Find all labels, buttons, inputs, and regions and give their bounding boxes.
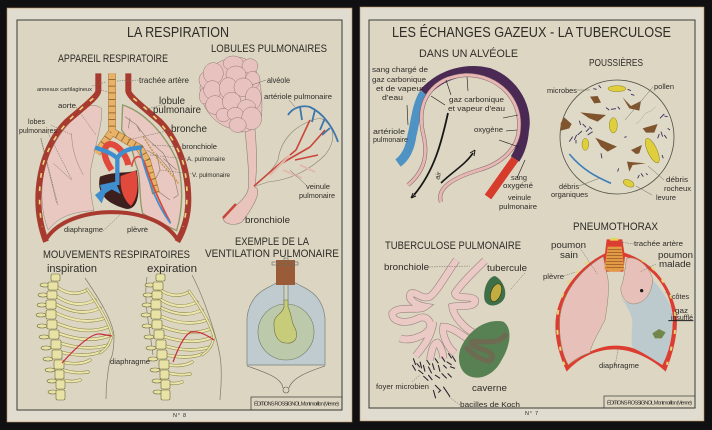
- labels: pneumothorax: insufflé: [671, 315, 693, 322]
- labels: tuberculosis: bronchiole: [384, 262, 429, 272]
- cavern: [459, 321, 509, 378]
- labels: alveolus: gaz carbonique: [449, 95, 504, 104]
- panel: échanges gazeux poster: [360, 7, 704, 421]
- labels: thorax: diaphragme: [64, 225, 103, 234]
- lobule vessels: [223, 106, 338, 218]
- lung balloon: [274, 300, 297, 343]
- labels: lobule: [245, 76, 335, 226]
- tube: [284, 258, 288, 302]
- labels: thorax: pulmonaires: [19, 128, 57, 135]
- ribs: [54, 287, 112, 382]
- labels: dust: levure: [656, 195, 676, 202]
- publisher text: ÉDITIONS ROSSIGNOL Montmorillon (Vienne): [254, 400, 339, 408]
- tubercle: [484, 276, 505, 305]
- poster inner frame right: [369, 20, 695, 408]
- inner circle: [258, 304, 314, 360]
- title: LA RESPIRATION: [127, 24, 229, 41]
- diaphragm curve: [62, 334, 112, 363]
- panel: la respiration poster: [7, 8, 352, 422]
- rib marks: [557, 260, 675, 365]
- labels: pneumothorax: trachée artère: [634, 239, 683, 248]
- poster paper right: [360, 7, 704, 421]
- labels: thorax: [19, 76, 231, 234]
- labels: thorax: lobes: [28, 119, 46, 126]
- label: inspiration: inspiration: [47, 263, 97, 275]
- heading: mouvements respiratoires: MOUVEMENTS RESPIRATOIRES: [43, 249, 190, 261]
- labels: tuberculosis: caverne: [472, 383, 507, 393]
- organic fibre: [569, 154, 611, 183]
- circle: [560, 80, 674, 194]
- labels: alveolus: pulmonaire: [373, 137, 408, 144]
- labels: thorax: A. pulmonaire: [187, 157, 226, 163]
- labels: tuberculosis: foyer microbien: [376, 384, 429, 391]
- publisher box: [251, 397, 342, 410]
- labels: thorax: plèvre: [127, 225, 148, 234]
- heading: exemple de la ventilation: EXEMPLE DE LA: [235, 236, 310, 248]
- venule red: [488, 159, 515, 197]
- leader lines: pneumothorax: [564, 242, 672, 366]
- ribs: [156, 289, 214, 384]
- labels: lobule: bronchiole: [245, 215, 290, 226]
- heart and vessels: [95, 144, 171, 223]
- left lung: [42, 105, 102, 230]
- labels: thorax: V. pulmonaire: [192, 173, 231, 179]
- labels: dust: débris: [666, 177, 689, 184]
- diagram: tuberculosis: [392, 260, 509, 398]
- labels: alveolus: d'eau: [382, 93, 403, 102]
- labels: alveolus: air: [434, 170, 444, 181]
- heading: pneumothorax: PNEUMOTHORAX: [573, 221, 659, 233]
- rock debris: [561, 96, 658, 172]
- rubber membrane: [247, 366, 325, 388]
- alveolar grape cluster: [199, 56, 262, 132]
- leader lines: tuberculosis: [412, 266, 525, 405]
- green spot: [652, 329, 666, 338]
- heading: poussières: POUSSIÈRES: [589, 56, 643, 69]
- labels: dust: pollen: [654, 84, 674, 91]
- wound dot: [640, 289, 643, 292]
- diagram: pulmonary lobules: [199, 56, 338, 224]
- label: diaphragme: diaphragme: [110, 359, 150, 366]
- diaphragm: [47, 212, 177, 238]
- labels: alveolus: sang: [511, 173, 527, 182]
- labels: alveolus: oxygène: [474, 125, 503, 134]
- labels: alveolus: pulmonaire: [499, 204, 537, 211]
- label: expiration: expiration: [147, 263, 197, 275]
- labels: thorax: trachée artère: [139, 76, 190, 85]
- labels: dust: [547, 84, 692, 202]
- poster inner frame left: [17, 20, 342, 410]
- labels: pneumothorax: plèvre: [543, 272, 564, 281]
- trachea rings: [604, 247, 624, 272]
- labels: lobule: alvéole: [267, 76, 290, 85]
- labels: alveolus: veinule: [508, 195, 531, 202]
- leader lines: [41, 80, 192, 231]
- publisher text: ÉDITIONS ROSSIGNOL Montmorillon (Vienne): [607, 400, 692, 406]
- heading line 2: VENTILATION PULMONAIRE: [205, 248, 339, 260]
- body contour: [146, 275, 221, 400]
- labels: thorax: pulmonaire: [153, 105, 201, 116]
- leader lines: dust: [577, 87, 664, 195]
- leader lines: lobule: [243, 80, 306, 220]
- labels: thorax: aorte: [58, 101, 76, 110]
- microbes: [569, 85, 670, 178]
- trachea and bronchi: [97, 73, 178, 193]
- sheet number: N° 7: [525, 411, 538, 417]
- labels: thorax: bronche: [171, 124, 207, 135]
- air arrows: [407, 77, 525, 198]
- diagram: expiration ribcage: [141, 274, 221, 400]
- publisher box border: [604, 396, 695, 408]
- thin fibre: [636, 107, 655, 124]
- labels: alveolus: artériole: [373, 129, 405, 136]
- labels: tuberculosis: tubercule: [487, 263, 527, 273]
- labels: alveolus: et de vapeur: [376, 84, 425, 93]
- diagram: pneumothorax: [555, 238, 693, 372]
- labels: alveolus: gaz carbonique: [372, 75, 426, 84]
- labels: lobule: veinule: [306, 184, 330, 191]
- jar: [247, 283, 325, 365]
- labels: thorax: bronchiole: [182, 142, 217, 151]
- thoracic wall: [38, 73, 188, 242]
- capillary purple: [424, 71, 525, 159]
- labels: alveolus: et vapeur d'eau: [448, 104, 505, 113]
- diagram: alveolus: [398, 71, 525, 202]
- labels: pneumothorax: côtes: [672, 294, 690, 301]
- tubercle core: [488, 282, 504, 303]
- Koch bacilli focus: [412, 353, 456, 398]
- membrane knob: [283, 387, 289, 393]
- labels: alveolus: oxygéné: [503, 181, 533, 190]
- labels: alveolus: sang chargé de: [372, 65, 428, 74]
- labels: pneumothorax: poumon: [551, 240, 586, 250]
- bronchiole tubes fill: [392, 260, 485, 360]
- bronchioles: [125, 117, 178, 200]
- rib dashes: [40, 98, 187, 227]
- arteriole blue: [398, 93, 424, 163]
- labels: tuberculosis: [376, 262, 527, 409]
- labels: thorax: anneaux cartilagineux: [37, 87, 92, 93]
- labels: pneumothorax: diaphragme: [599, 361, 639, 370]
- labels: tuberculosis: bacilles de Koch: [460, 400, 520, 409]
- labels: thorax: lobule: [159, 96, 185, 107]
- right lung: [122, 105, 182, 231]
- labels: dust: débris: [559, 184, 580, 191]
- heading: tuberculose pulmonaire: TUBERCULOSE PULMONAIRE: [385, 240, 521, 252]
- healthy lung: [560, 257, 608, 365]
- labels: pneumothorax: poumon: [658, 250, 693, 260]
- labels: lobule: artériole pulmonaire: [264, 92, 332, 101]
- title: LES ÉCHANGES GAZEUX - LA TUBERCULOSE: [392, 24, 671, 41]
- labels: lobule: pulmonaire: [299, 193, 335, 200]
- insufflation needle: [668, 319, 693, 322]
- labels: pneumothorax: sain: [560, 250, 578, 260]
- diagram: thorax and lungs: [38, 73, 188, 242]
- labels: dust: rocheux: [664, 186, 692, 193]
- diagram: bell jar: [247, 258, 325, 393]
- larynx top: [610, 238, 618, 241]
- cavern inner wall: [465, 333, 507, 361]
- diagram: dust circle: [560, 80, 674, 194]
- trachea ring lines: [606, 249, 624, 267]
- labels: pneumothorax: gaz: [675, 306, 688, 315]
- labels: dust: microbes: [547, 88, 578, 95]
- yeast and pollen: [582, 86, 662, 189]
- lobe lines: [41, 133, 83, 203]
- poster paper left: [7, 8, 352, 422]
- labels: pneumothorax: malade: [659, 259, 691, 269]
- labels: dust: organiques: [551, 192, 589, 199]
- bronchiole tube: [223, 128, 258, 224]
- bronchiole tubes outline: [392, 260, 485, 360]
- body contour: [85, 278, 114, 399]
- insufflated gas: [621, 280, 673, 365]
- publisher box: [604, 396, 695, 408]
- sheet number: N° 8: [173, 413, 186, 419]
- labels: pneumothorax: [543, 239, 693, 370]
- alveolar wall: [408, 75, 519, 202]
- heading: lobules pulmonaires: LOBULES PULMONAIRES: [211, 43, 327, 55]
- chest wall: [555, 239, 677, 372]
- diaphragm curve: [173, 332, 214, 362]
- cork: [276, 260, 295, 285]
- diagram: inspiration ribcage: [36, 274, 114, 400]
- spine: [141, 274, 170, 400]
- heading: appareil respiratoire: APPAREIL RESPIRATOIRE: [58, 53, 168, 65]
- jar lip: [272, 262, 298, 265]
- chest cavity: [560, 257, 673, 365]
- collapsed lung: [621, 258, 653, 304]
- spine: [36, 274, 65, 400]
- heading: dans un alvéole: DANS UN ALVÉOLE: [419, 47, 518, 60]
- publisher box border: [251, 397, 342, 410]
- labels: alveolus: [372, 65, 537, 211]
